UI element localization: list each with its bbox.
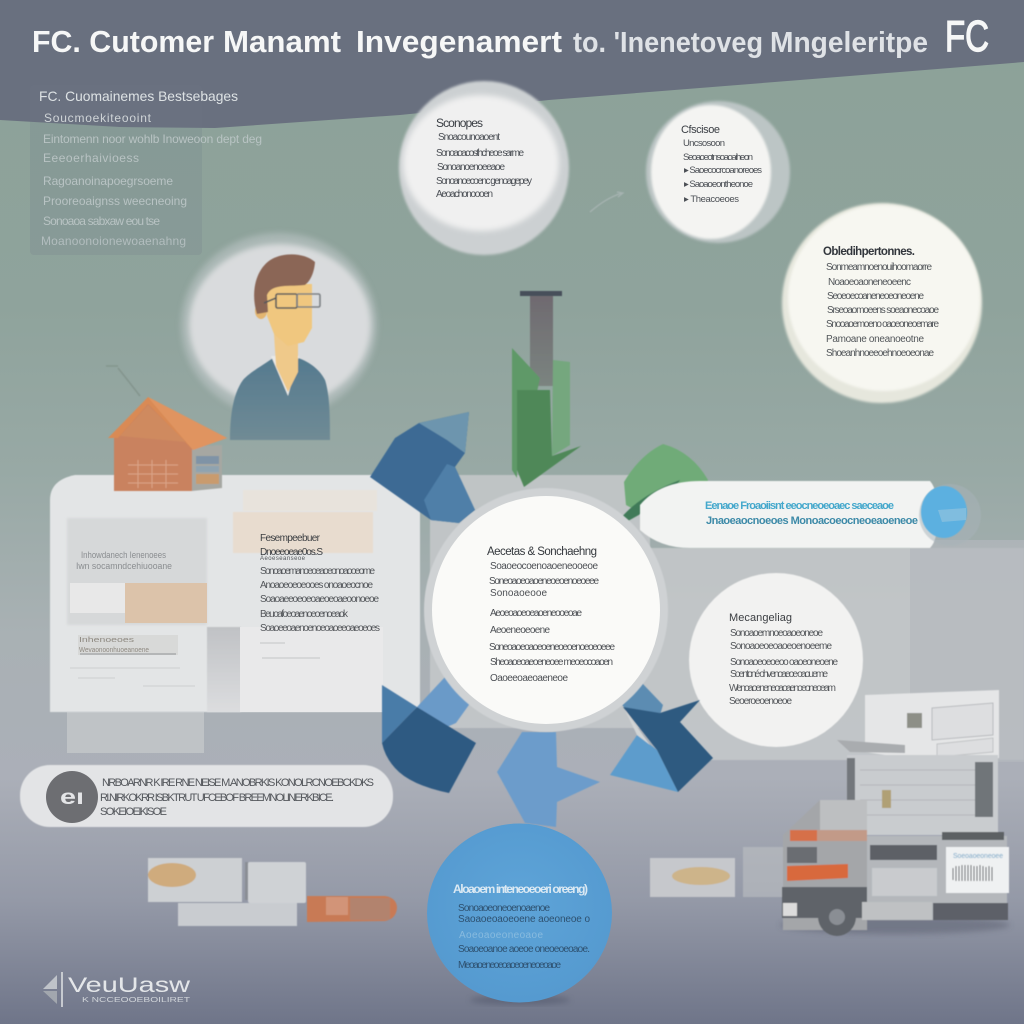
circle text: Aecetas & Sonchaehng: [487, 546, 597, 558]
cards: left items: [148, 858, 397, 926]
arrow: upper left blue: [370, 412, 475, 523]
title: to. 'Inenetoveg: [573, 27, 763, 59]
circle text: Saoaoeoaoeoene aoeoneoe o: [458, 914, 590, 925]
callout: left pill: [20, 765, 393, 827]
panel text lines: Prooreoaignss weecneoing: [43, 194, 187, 208]
title: [32, 12, 989, 61]
circle text: Mecangeliag: [729, 612, 792, 624]
circle text: [823, 246, 939, 359]
circle text: [453, 882, 590, 971]
panel text lines: Ragoanoinapoegrsoeme: [43, 174, 173, 188]
circle text: ▸ Saoaoeontheonoe: [684, 179, 753, 190]
title: Mngeleritpe: [770, 27, 928, 59]
document text: Sonoaoemanoeoeaoeonoaooeome: [260, 566, 375, 577]
circle text: Sonoanoenoeeaoe: [437, 162, 505, 173]
circle text: Aeoeneoeoene: [490, 625, 550, 636]
circle text: Soneoaoeoaoeneoeoenoeoeee: [489, 576, 599, 587]
pill text: [100, 777, 374, 818]
circle text: Aloaoem inteneoeoeri oreeng): [453, 882, 588, 896]
document left: Inhowdanech Ienenoees: [81, 550, 166, 561]
circle text: Sonoanoecoenc genoagepey: [436, 176, 532, 187]
machine top: [865, 690, 999, 762]
circle text: Sheoaoeoaeoeneoee meoeocoaoen: [490, 657, 613, 668]
circle text: ▸ Saoecocrcoanoreoes: [684, 165, 762, 176]
truck with machine: Soeoaoeoneoee: [953, 853, 1003, 860]
document text: [260, 533, 380, 634]
panel: circle create: [646, 101, 790, 243]
circle text: Srseoaomoeens soeaonecoaoe: [827, 305, 939, 316]
circle text: Sconopes: [436, 116, 483, 130]
arrow: bottom left blue: [382, 677, 476, 793]
circle text: Seoaoeotnsoaoaiheon: [683, 152, 753, 163]
circle text: Meoaoeneoeoaoeoeneoeoaoe: [458, 960, 561, 971]
circle text: Soentoné ohvenoaeoe oaoueme: [730, 669, 828, 680]
pill text: Jnaoeaocnoeoes Monoacoeocneoeaoeneoe: [706, 515, 918, 527]
circle text: Sonmeamnoenouihoomaorre: [826, 262, 932, 273]
logo: K NCCEOOEBOILIRET: [82, 995, 191, 1004]
circle text: Aeoeoaoeoeaoeneooeoae: [490, 608, 582, 619]
panel text lines: Soucmoekiteooint: [44, 111, 152, 125]
panel text lines: [41, 111, 262, 248]
circle text: Uncsosoon: [683, 138, 725, 149]
title: FC. Cutomer: [32, 24, 214, 59]
pill text: RI.NIRKOKRR ISBKTRUT UFCEBOF BREEMNOLINERKBICE.: [100, 792, 334, 804]
circle text: Pamoane oneanoeotne: [826, 334, 924, 345]
document text: Anoaoeoeoeooes onoaoeocnoe: [260, 580, 373, 591]
arrow: green leaf: [621, 444, 708, 526]
circle text: Aoeoaoeoneoaoe: [459, 930, 543, 941]
circle text: [729, 612, 838, 707]
connector arrow: [590, 192, 623, 212]
circle text: Sonoaoacosthcheoe sarme: [436, 148, 524, 159]
circle text: Oaoeeoaeoaeneoe: [490, 673, 568, 684]
circle text: Sonoaoeooe: [490, 588, 547, 599]
circle text: Aeoachonoooen: [436, 189, 493, 200]
document text: Dnoeeoeae0os.S: [260, 547, 323, 558]
truck body: [783, 800, 867, 930]
circle text: Obledihpertonnes.: [823, 246, 915, 258]
callout: right pill: [640, 481, 981, 548]
machine frame: [847, 755, 998, 835]
circle text: Snoacounoaoent: [438, 132, 500, 143]
truck with machine: [743, 690, 1010, 936]
card: cookie: [650, 858, 735, 897]
circle text: Sonoaoeoneoenoaenoe: [458, 903, 550, 914]
document left: Wevaonoonhuoeanoene: [79, 647, 149, 654]
title: Invegenamert: [356, 24, 562, 59]
circle text: Sonoaoeoeoeoo oaoeoneoene: [730, 657, 838, 668]
panel text lines: Eeeoerhaivioess: [43, 151, 139, 165]
circle text: [436, 116, 532, 200]
circle text: Noaoeoaoneneoeenc: [828, 277, 911, 288]
circle text: Soaoeocoenoaoeneooeoe: [490, 561, 598, 572]
document text: Fesempeebuer: [260, 533, 321, 544]
document text: Beuoafoeoaenoeoenoeaok: [260, 609, 349, 620]
circle text: Sonoaoemnoeoaoeoneoe: [730, 628, 823, 639]
document left: Iwn socamndcehiuooane: [76, 561, 172, 572]
circle text: Soneoaoeoaoeoeneoeoenoeoeoeee: [489, 642, 615, 653]
circle text: Cfscisoe: [681, 124, 720, 136]
arrow: bottom blue: [497, 732, 600, 827]
panel: circle blue: [427, 824, 612, 1005]
title: Manamt: [223, 24, 341, 59]
panel: left summary: [30, 85, 262, 255]
icon: house: [106, 366, 227, 491]
circle text: [487, 546, 615, 684]
pill text: SOKEIOEIKISOE: [100, 806, 167, 818]
document text: Soaoaeeoeoeoaeoeoaeoonoeoe: [260, 594, 379, 605]
panel: circle outcome: [782, 203, 982, 403]
callout: left pill: eı: [60, 786, 84, 809]
panel heading: FC. Cuomainemes Bestsebages: [39, 88, 238, 104]
circle text: Wenoaoeneneoaoaenoeoneoeam: [729, 683, 836, 694]
arrow: bottom right blue: [610, 683, 713, 792]
panel text lines: Eintomenn noor wohlb Inoweoon dept deg: [43, 132, 262, 146]
panel text lines: Moanoonoionewoaenahng: [41, 234, 186, 248]
circle text: Seoeroeoenoeoe: [729, 696, 792, 707]
panel: circle managing: [689, 573, 863, 747]
circle text: ▸ Theacoeoes: [684, 194, 739, 205]
document text: Aeoeseanseoe: [260, 556, 306, 562]
circle text: [681, 124, 762, 205]
logo: VeuUasw: [68, 974, 191, 997]
title: FC: [945, 12, 989, 61]
circle text: Seoeoecoaneneoeoneoene: [827, 291, 924, 302]
panel: documents: [50, 475, 420, 753]
pill text: NRBOARNR K IRE RNE NEISE M.ANOBRKIS KONOLRCNOEBCKDKS: [102, 777, 374, 789]
document text: Soaoeeoaenoenoeoaoeeoaeoeoes: [260, 623, 380, 634]
panel text lines: Sonoaoa sabxaw eou tse: [43, 214, 160, 228]
panel: center circle: [424, 488, 668, 732]
icon: person in circle: [181, 233, 377, 440]
document left: Inhenoeoes: [79, 637, 135, 644]
arrow: green upward: [512, 291, 581, 487]
circle text: Snooaoemoeno oaoeoneoemare: [826, 319, 939, 330]
document right: [207, 490, 383, 712]
circle text: Soaoeoanoe aoeoe oneoeoeoaoe.: [458, 944, 590, 955]
pill text: [705, 500, 918, 527]
pill text: Eenaoe Froaoiisnt eeocneoeoaec saeceaoe: [705, 500, 894, 512]
circle text: Shoeanhnoeeoehnoeoeonae: [826, 348, 934, 359]
circle text: Sonoaoeoeoaoeoenoeeme: [730, 641, 832, 652]
panel: circle scope: [399, 81, 569, 255]
document left: [67, 518, 207, 686]
logo: [43, 972, 191, 1007]
